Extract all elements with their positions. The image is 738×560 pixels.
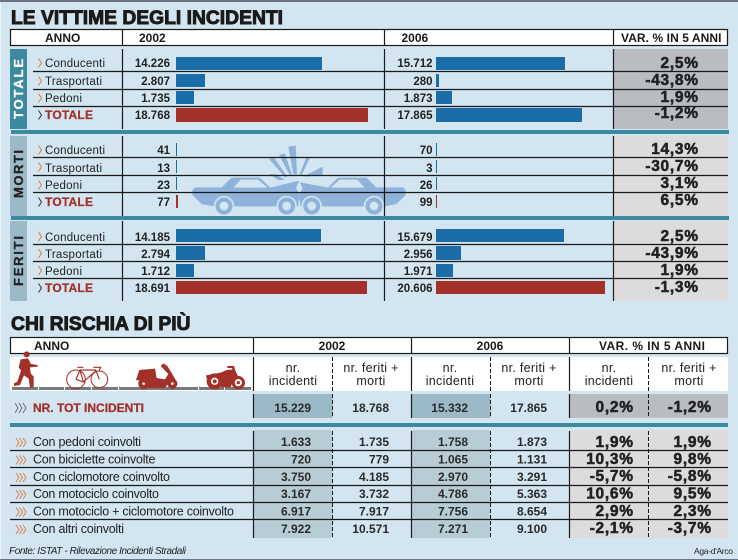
table: risk categories: 3.732: [359, 487, 389, 501]
variation values: morti: 14,3%: [651, 141, 699, 158]
side label: morti: [10, 136, 27, 216]
row labels: totale: TOTALE: [45, 108, 93, 122]
table: risk categories: [10, 430, 728, 538]
bar chart: morti 2006: 26: [420, 180, 432, 192]
variation values: feriti: 2,5%: [661, 228, 699, 245]
table: risk categories: -3,7%: [668, 520, 712, 537]
table: risk categories: 10,6%: [586, 486, 634, 502]
variation values: morti: [645, 141, 699, 209]
bar chart: morti 2002: 41: [157, 145, 171, 157]
table: risk categories: 2.970: [438, 470, 468, 484]
table: risk categories: 7.922: [281, 522, 311, 536]
row: totale incidenti: -1,2%: [668, 399, 712, 416]
row labels: feriti: Pedoni: [45, 266, 82, 278]
table: risk categories: Con pedoni coinvolti: [33, 435, 141, 449]
bar chart: morti 2006: [420, 143, 437, 209]
bar chart: feriti 2006: 2.956: [404, 249, 432, 261]
bar chart: morti 2002: [157, 143, 178, 209]
table header: victims: VAR. % IN 5 ANNI: [621, 31, 722, 45]
row labels: morti: TOTALE: [45, 195, 93, 209]
row: totale incidenti: 17.865: [510, 401, 547, 415]
table: risk categories: 1.633: [281, 435, 311, 449]
bar chart: totale 2006: 280: [413, 76, 432, 88]
column headings: nr. feriti +: [343, 361, 399, 375]
panel: morti: [10, 136, 728, 216]
table: risk categories: 9,8%: [674, 451, 712, 468]
column headings: morti: [674, 374, 704, 388]
row labels: morti: Trasportati: [45, 163, 102, 175]
side label: totale: TOTALE: [11, 59, 26, 119]
table header: victims: ANNO: [45, 31, 80, 45]
table: risk categories: -2,1%: [590, 520, 634, 537]
icon: motorcycle: [206, 366, 245, 389]
row labels: feriti: [38, 232, 105, 295]
credit: Aga-d'Arco: [694, 546, 733, 556]
row: totale incidenti: 18.768: [352, 401, 389, 415]
table header: risk: 2002: [319, 339, 346, 353]
row labels: morti: Pedoni: [45, 180, 82, 192]
table: risk categories: Con biciclette coinvolte: [33, 452, 156, 466]
variation background: morti: [614, 136, 728, 216]
icon: bicycle: [67, 367, 108, 389]
bar chart: totale 2002: [135, 57, 368, 122]
table: risk categories: 7.917: [359, 504, 389, 518]
table: risk categories: 1,9%: [596, 434, 634, 451]
panel: feriti: [10, 221, 728, 301]
table header: victims: [10, 30, 728, 46]
bar chart: totale 2002: 1.735: [141, 93, 171, 105]
table header: risk: [10, 338, 728, 354]
table: risk categories: 1.065: [438, 452, 468, 466]
table: risk categories: 7.271: [438, 522, 468, 536]
source note: Fonte: ISTAT - Rilevazione Incidenti Stradali: [9, 546, 187, 557]
row labels: feriti: TOTALE: [45, 281, 93, 295]
side label: feriti: FERITI: [11, 236, 26, 286]
variation values: totale: [645, 55, 699, 122]
column headings: nr. feriti +: [661, 361, 717, 375]
row labels: totale: Conducenti: [45, 58, 105, 70]
table: risk categories: 2,3%: [674, 503, 712, 520]
table: risk categories: Con altri coinvolti: [33, 522, 124, 536]
table: risk categories: 5.363: [517, 487, 547, 501]
table: risk categories: 9.100: [517, 522, 547, 536]
table: risk categories: 4.185: [359, 470, 389, 484]
side label: feriti: [10, 221, 27, 301]
column headings: incidenti: [585, 374, 633, 388]
table: risk categories: 1,9%: [674, 434, 712, 451]
bar chart: feriti 2002: 1.712: [141, 266, 170, 278]
bar chart: totale 2006: 1.873: [404, 93, 432, 105]
row labels: morti: Conducenti: [45, 145, 105, 157]
bar chart: feriti 2002: 18.691: [135, 283, 171, 295]
column headings: morti: [356, 374, 386, 388]
table: risk categories: 3.291: [517, 470, 547, 484]
bar chart: feriti 2002: [135, 229, 367, 295]
table: risk categories: Con ciclomotore coinvolto: [33, 470, 170, 484]
variation values: totale: 1,9%: [661, 89, 699, 106]
table: risk categories: 720: [291, 452, 311, 466]
chevrons: [15, 403, 26, 413]
table: risk categories: 7.756: [438, 504, 468, 518]
table: risk categories: 2,9%: [596, 503, 634, 520]
table: risk categories: 3.750: [281, 470, 311, 484]
variation background: totale: [614, 49, 728, 129]
table: risk categories: 779: [369, 452, 389, 466]
column headings: incidenti: [426, 374, 474, 388]
column headings: morti: [514, 374, 544, 388]
table: risk categories: 6.917: [281, 504, 311, 518]
variation values: morti: 6,5%: [661, 192, 699, 209]
row labels: feriti: Conducenti: [45, 232, 105, 244]
bar chart: feriti 2002: 2.794: [141, 249, 171, 261]
column headings: nr.: [286, 361, 300, 375]
row labels: totale: Trasportati: [45, 76, 102, 88]
row: totale incidenti: NR. TOT INCIDENTI: [33, 401, 144, 415]
variation values: feriti: [645, 228, 699, 296]
row labels: feriti: Trasportati: [45, 249, 102, 261]
subheader strip: [10, 351, 728, 391]
row: totale incidenti: [15, 394, 728, 418]
row: totale incidenti: 15.229: [274, 401, 311, 415]
row: totale incidenti: 0,2%: [596, 399, 634, 416]
bar chart: totale 2006: [397, 57, 582, 122]
table header: risk: VAR. % IN 5 ANNI: [599, 339, 705, 353]
column headings: [269, 361, 717, 388]
title: le vittime degli incidenti: LE VITTIME DEGLI INCIDENTI: [11, 8, 283, 29]
row labels: morti: [38, 145, 105, 209]
chevrons: [16, 438, 26, 534]
column headings: nr. feriti +: [501, 361, 557, 375]
column headings: nr.: [602, 361, 616, 375]
variation values: totale: 2,5%: [661, 55, 699, 72]
variation values: feriti: -43,9%: [645, 245, 699, 262]
table: risk categories: 1.758: [438, 435, 468, 449]
bar chart: totale 2002: 2.807: [141, 76, 170, 88]
table: risk categories: Con motociclo + ciclomotore coinvolto: [33, 504, 234, 518]
panel: totale: [10, 49, 728, 129]
bar chart: feriti 2002: 14.185: [135, 232, 171, 244]
bar chart: morti 2006: 99: [420, 197, 432, 209]
variation values: feriti: -1,3%: [655, 279, 699, 296]
icon: scooter: [136, 363, 177, 389]
table header: risk: ANNO: [34, 339, 69, 353]
table: risk categories: 8.654: [517, 504, 547, 518]
bar chart: morti 2006: 3: [426, 163, 432, 175]
column headings: nr.: [443, 361, 457, 375]
table: risk categories: -5,8%: [668, 468, 712, 485]
column headings: incidenti: [269, 374, 317, 388]
table: risk categories: 9,5%: [674, 486, 712, 502]
bar chart: totale 2002: 14.226: [135, 58, 170, 70]
row labels: totale: [38, 58, 105, 122]
table: risk categories: 4.786: [438, 487, 468, 501]
icon: pedestrian: [14, 351, 38, 387]
row: totale incidenti: 15.332: [431, 401, 468, 415]
bar chart: feriti 2006: 15.679: [397, 232, 432, 244]
row labels: totale: Pedoni: [45, 93, 82, 105]
table: risk categories: 1.873: [517, 435, 547, 449]
variation background: feriti: [614, 221, 728, 301]
variation values: feriti: 1,9%: [661, 262, 699, 279]
table header: victims: 2002: [139, 31, 166, 45]
side label: morti: MORTI: [11, 150, 26, 198]
variation values: morti: 3,1%: [661, 175, 699, 192]
table: risk categories: 10,3%: [586, 451, 634, 468]
variation values: totale: -43,8%: [645, 72, 699, 89]
bar chart: morti 2002: 77: [157, 197, 170, 209]
table header: risk: 2006: [477, 339, 504, 353]
table: risk categories: 3.167: [281, 487, 311, 501]
illustration: car crash: [192, 146, 406, 215]
title: chi rischia di più: CHI RISCHIA DI PIÙ: [11, 313, 190, 335]
bar chart: morti 2002: 23: [157, 180, 170, 192]
bar chart: morti 2006: 70: [420, 145, 432, 157]
table header: victims: 2006: [402, 31, 429, 45]
road segments: [12, 387, 251, 390]
variation values: totale: -1,2%: [655, 105, 699, 122]
table: risk categories: 10.571: [352, 522, 389, 536]
bar chart: feriti 2006: [397, 229, 605, 295]
bar chart: totale 2006: 15.712: [397, 58, 432, 70]
bar chart: feriti 2006: 1.971: [404, 266, 433, 278]
bar chart: totale 2002: 18.768: [135, 110, 171, 122]
bar chart: totale 2006: 17.865: [397, 110, 433, 122]
side label: totale: [10, 49, 27, 129]
bar chart: feriti 2006: 20.606: [397, 283, 432, 295]
table: risk categories: Con motociclo coinvolto: [33, 487, 159, 501]
table: risk categories: -5,7%: [590, 468, 634, 485]
variation values: morti: -30,7%: [645, 158, 699, 175]
bar chart: morti 2002: 13: [157, 163, 170, 175]
table: risk categories: 1.131: [517, 452, 547, 466]
table: risk categories: 1.735: [359, 435, 389, 449]
